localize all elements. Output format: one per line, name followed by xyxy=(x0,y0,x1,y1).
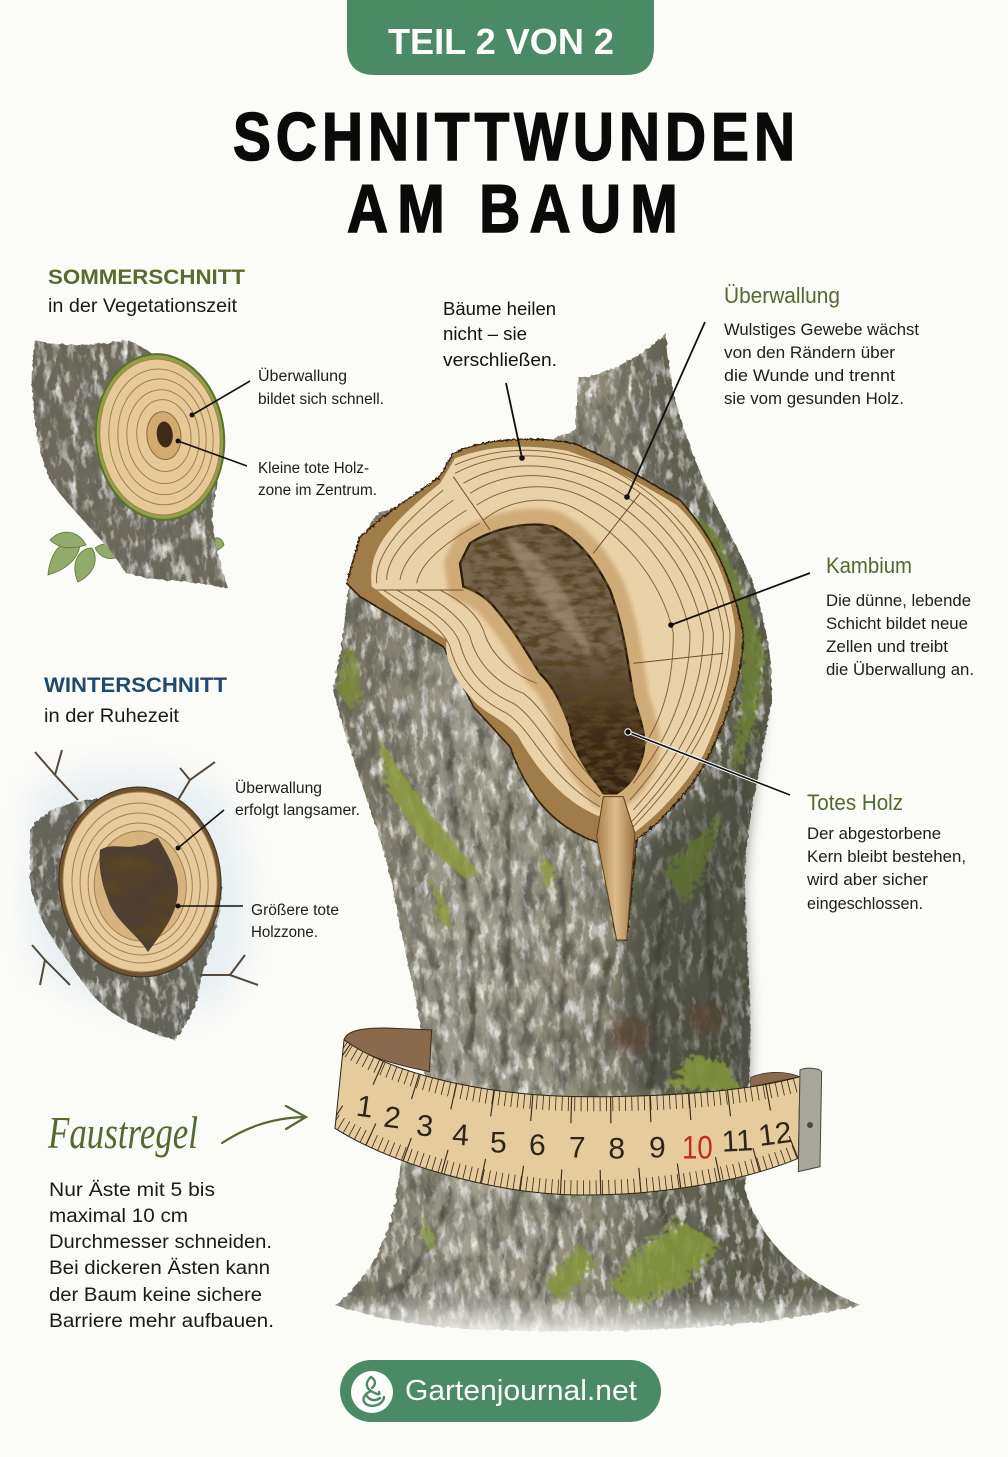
tape numbers: 8 xyxy=(608,1132,625,1165)
text block: rule xyxy=(49,1180,274,1332)
dead core xyxy=(460,525,644,793)
label: Kambium: Schicht bildet neue xyxy=(826,614,968,633)
tape numbers: 10 xyxy=(682,1130,713,1166)
tape numbers: 1 xyxy=(354,1090,375,1125)
text block: rule: maximal 10 cm xyxy=(49,1206,188,1227)
tape numbers: 9 xyxy=(649,1132,666,1165)
callout: summer overgrowth: bildet sich schnell. xyxy=(258,391,384,408)
tape numbers: 3 xyxy=(415,1109,435,1144)
spike xyxy=(597,797,635,940)
subheading: summer: in der Vegetationszeit xyxy=(48,296,238,317)
label: Totes Holz: Kern bleibt bestehen, xyxy=(807,847,966,866)
icon: leaves xyxy=(48,522,224,582)
label: Totes Holz: Totes Holz xyxy=(807,790,903,815)
text block: rule: Bei dickeren Ästen kann xyxy=(49,1258,270,1279)
tape numbers: 5 xyxy=(490,1127,507,1160)
tape front xyxy=(335,1040,800,1195)
title: AM BAUM xyxy=(347,171,678,247)
callout: summer dead zone: Kleine tote Holz- xyxy=(258,460,369,477)
callout: summer overgrowth: Überwallung xyxy=(258,367,347,385)
tape clip xyxy=(798,1068,822,1172)
label: Überwallung: sie vom gesunden Holz. xyxy=(724,389,904,408)
label: Kambium xyxy=(826,553,974,679)
illustration: winter frost wash xyxy=(29,769,249,1012)
icon: logo xyxy=(351,1371,393,1413)
arrow: to tape xyxy=(222,1106,306,1143)
callout: winter dead zone xyxy=(176,902,339,941)
callout: winter overgrowth: erfolgt langsamer. xyxy=(235,802,360,819)
illustration: main tree xyxy=(310,322,880,1340)
heading: Faustregel: Faustregel xyxy=(47,1107,198,1158)
label: Kambium: die Überwallung an. xyxy=(826,660,974,679)
leader: dead wood xyxy=(625,729,790,795)
illustration: winter wood disc xyxy=(53,782,227,982)
radial cracks xyxy=(377,477,723,663)
tape numbers: 11 xyxy=(721,1124,754,1159)
heading: summer: SOMMERSCHNITT xyxy=(48,266,245,289)
callout: summer dead zone: zone im Zentrum. xyxy=(258,482,377,499)
tape numbers xyxy=(354,1090,794,1166)
trunk xyxy=(333,333,860,1331)
trunk shadow right side xyxy=(623,700,765,1090)
label: Totes Holz: wird aber sicher xyxy=(806,870,928,889)
tape back right xyxy=(751,1072,800,1087)
callout: winter overgrowth xyxy=(176,779,360,850)
growth rings xyxy=(376,450,730,830)
cut wound xyxy=(347,439,743,940)
panel: rule of thumb xyxy=(47,1106,306,1332)
illustration: winter branch bark xyxy=(30,794,222,1040)
wood rim xyxy=(347,439,743,940)
bark fissures xyxy=(380,760,713,1325)
tape numbers: 12 xyxy=(757,1116,794,1153)
label: Überwallung: die Wunde und trennt xyxy=(724,366,895,385)
illustration: winter dead core xyxy=(99,838,178,952)
footer badge: brand: Gartenjournal.net xyxy=(405,1375,637,1407)
tape numbers: 4 xyxy=(451,1118,470,1153)
illustration: measuring tape xyxy=(335,1028,822,1195)
tape numbers: 7 xyxy=(569,1132,586,1165)
core light streak xyxy=(507,537,593,660)
label: Totes Holz xyxy=(806,790,966,913)
tape clip rivet xyxy=(807,1122,813,1128)
tape numbers: 2 xyxy=(382,1101,402,1136)
panel: summer cut xyxy=(32,266,384,588)
tape back inside xyxy=(344,1028,432,1072)
text block: heal note: Bäume heilen xyxy=(443,298,556,319)
text block: heal note: nicht – sie xyxy=(443,323,527,344)
light wood xyxy=(371,447,735,833)
fade of the trunk base xyxy=(310,1295,880,1340)
label: Überwallung xyxy=(724,283,919,408)
tape numbers: 6 xyxy=(529,1129,546,1162)
label: Überwallung: von den Rändern über xyxy=(724,343,895,362)
leader: cambium xyxy=(668,573,810,628)
label: Kambium: Kambium xyxy=(826,553,912,578)
callout: summer overgrowth xyxy=(190,367,384,418)
label: Überwallung: Überwallung xyxy=(724,283,840,308)
callout: winter dead zone: Holzzone. xyxy=(251,924,318,941)
label: Totes Holz: eingeschlossen. xyxy=(807,894,923,913)
footer badge: brand xyxy=(340,1360,661,1422)
header tab: part label: TEIL 2 VON 2 xyxy=(388,21,614,62)
bark knots xyxy=(610,1004,721,1051)
text block: heal note: verschließen. xyxy=(443,349,557,370)
label: Kambium: Zellen und treibt xyxy=(826,637,948,656)
text block: heal note xyxy=(443,298,557,370)
text block: rule: Barriere mehr aufbauen. xyxy=(49,1311,274,1332)
illustration: winter twigs xyxy=(32,750,258,985)
callout: winter dead zone: Größere tote xyxy=(251,902,339,919)
title: SCHNITTWUNDEN xyxy=(233,99,795,175)
illustration: summer branch bark xyxy=(32,340,228,588)
title xyxy=(233,99,795,247)
panel: winter cut xyxy=(29,674,360,1040)
tape ticks xyxy=(335,1047,800,1188)
text block: rule: der Baum keine sichere xyxy=(49,1285,262,1306)
callout: summer dead zone xyxy=(176,438,377,499)
heading: winter: WINTERSCHNITT xyxy=(44,674,227,697)
leader: heal note xyxy=(506,383,525,461)
text block: rule: Durchmesser schneiden. xyxy=(49,1232,272,1253)
illustration: summer wood disc xyxy=(88,348,232,526)
label: Totes Holz: Der abgestorbene xyxy=(807,824,941,843)
header tab: part label xyxy=(347,0,654,75)
text block: rule: Nur Äste mit 5 bis xyxy=(49,1180,215,1201)
label: Überwallung: Wulstiges Gewebe wächst xyxy=(724,320,919,339)
label: Kambium: Die dünne, lebende xyxy=(826,591,971,610)
darker band around the core xyxy=(460,525,644,793)
callout: winter overgrowth: Überwallung xyxy=(235,779,322,797)
moss patches xyxy=(338,510,765,1305)
leader: overgrowth xyxy=(624,322,705,500)
subheading: winter: in der Ruhezeit xyxy=(44,706,180,727)
